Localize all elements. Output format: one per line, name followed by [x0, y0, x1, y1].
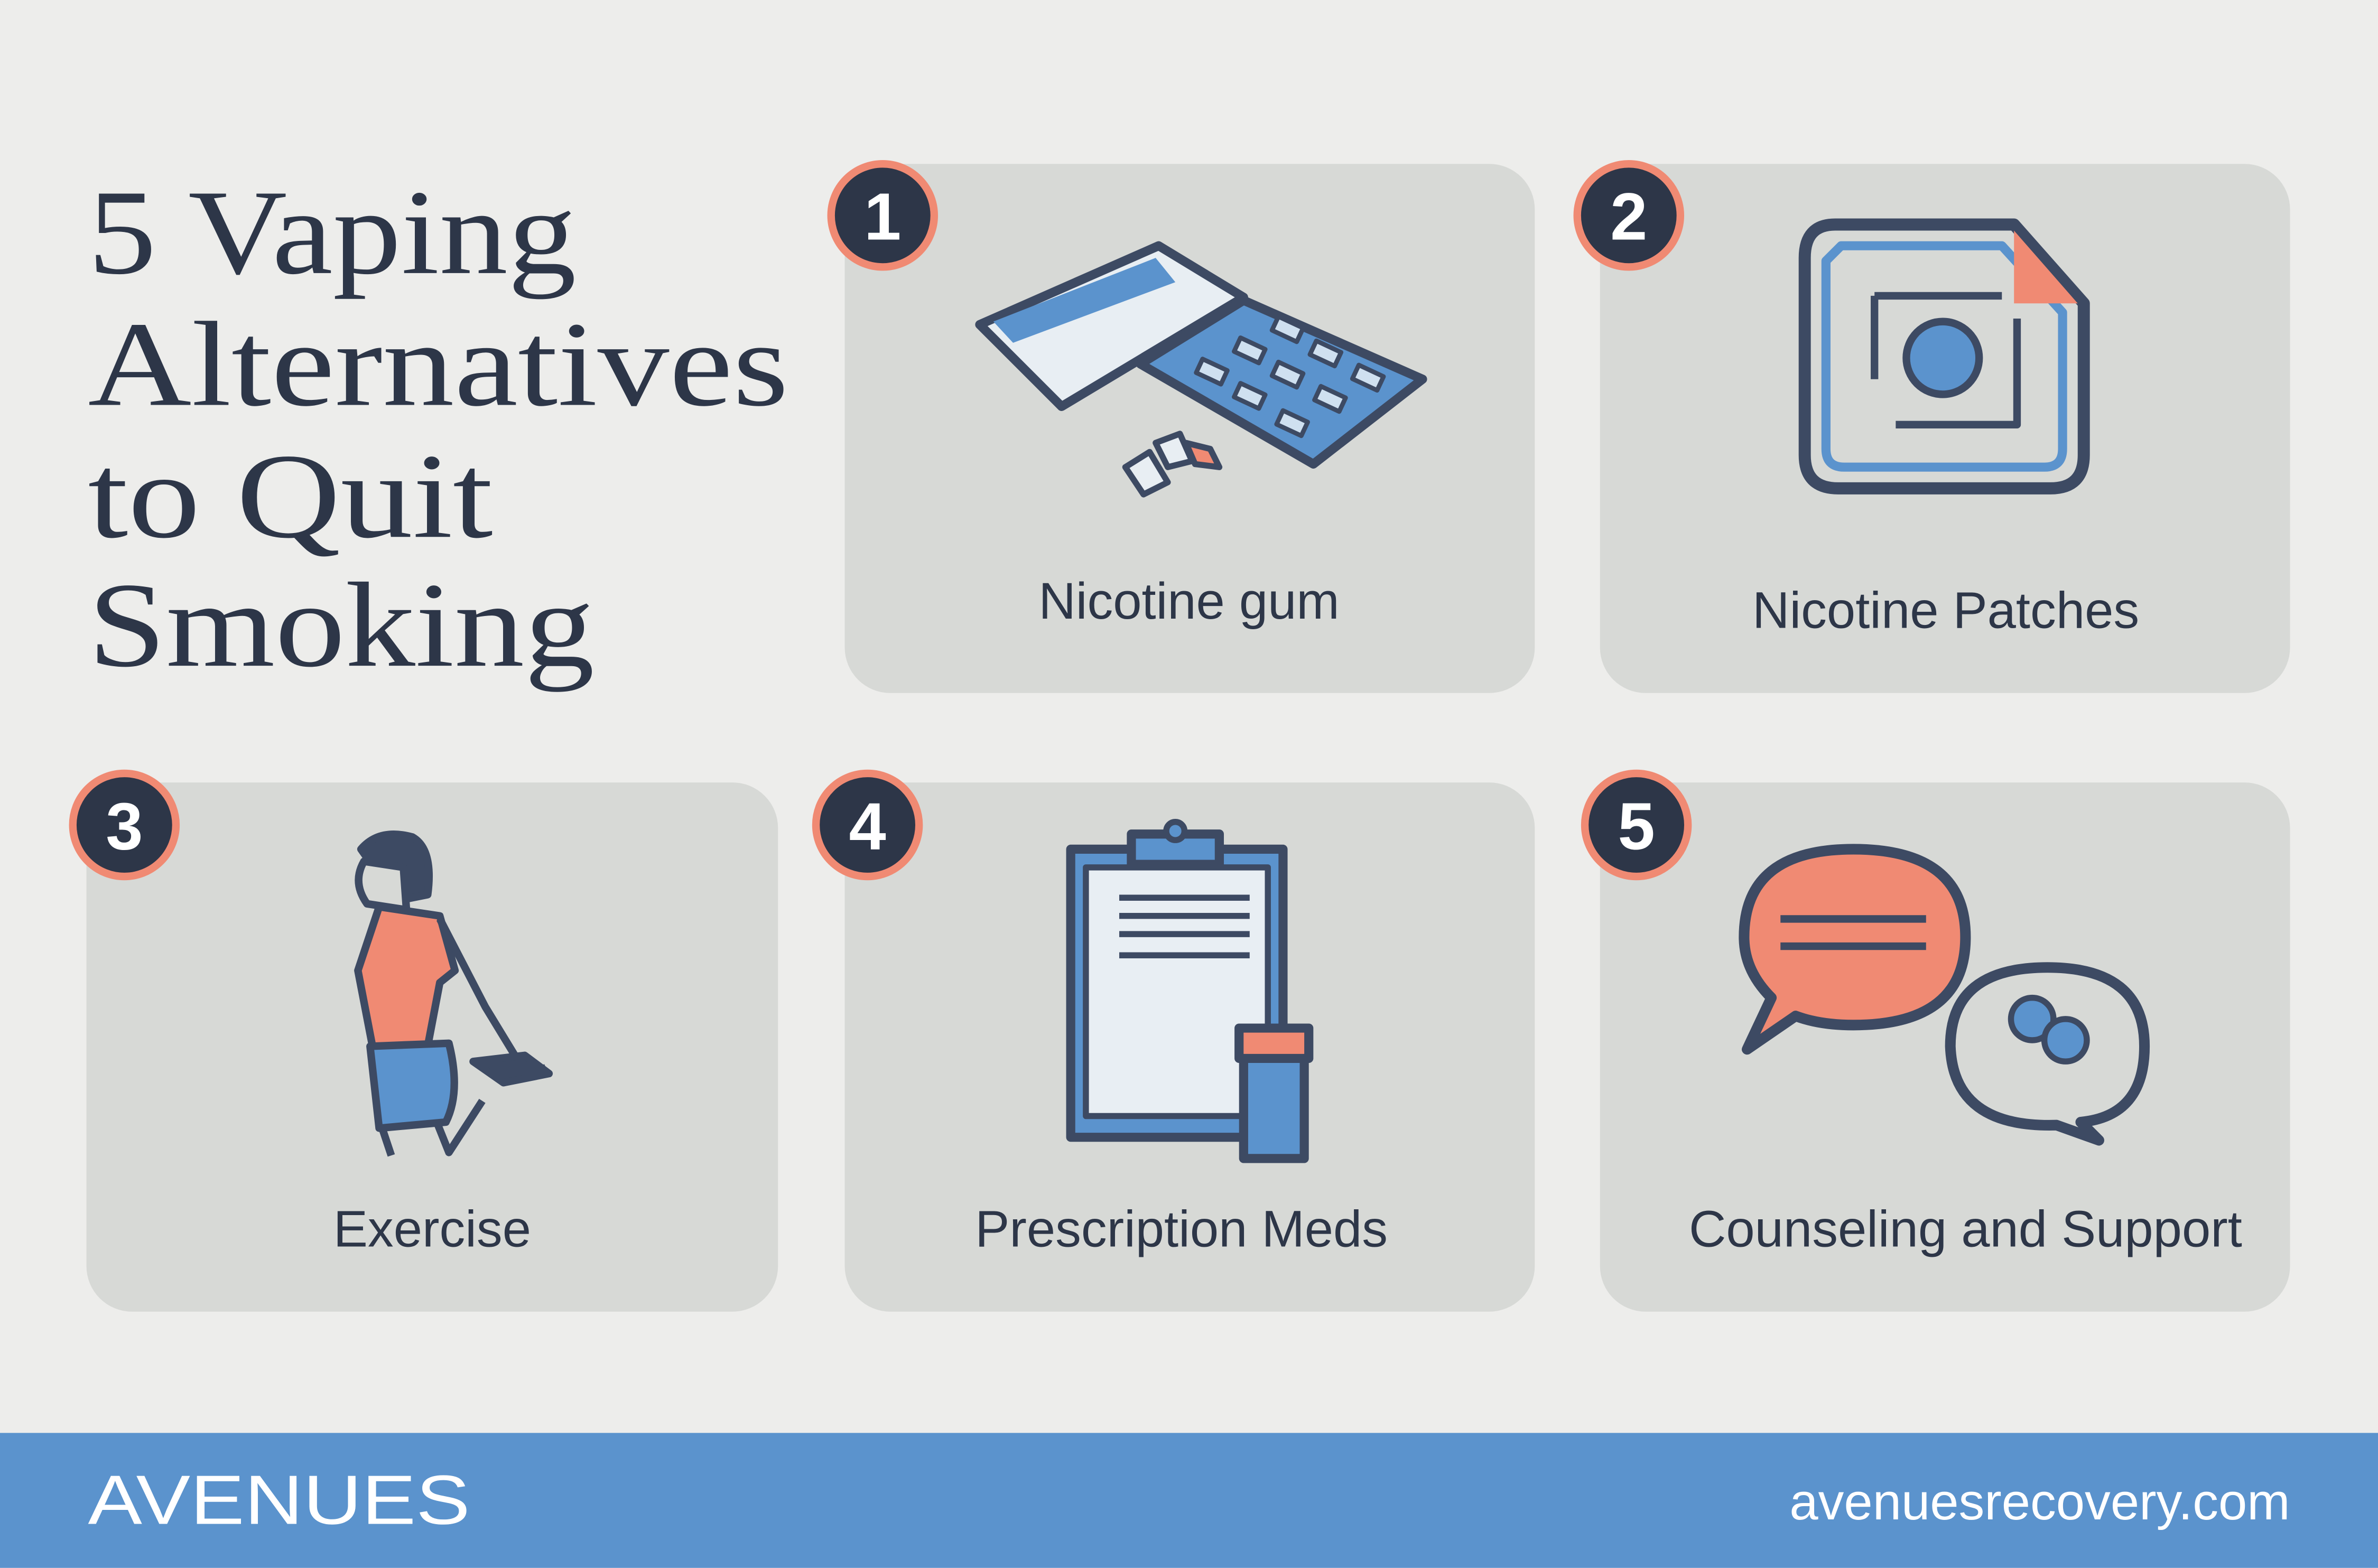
label: counseling and support: Counseling and Support: [1689, 1200, 2242, 1257]
panel: prescription meds: [845, 782, 1535, 1312]
title: [88, 165, 788, 692]
title: 5 Vaping: [88, 165, 577, 300]
badge 1: 1: [864, 180, 901, 254]
footer: [0, 1433, 2378, 1568]
label: prescription meds: Prescription Meds: [975, 1200, 1388, 1257]
badge 3: [73, 773, 176, 876]
logo: avenues: AVENUES: [88, 1461, 470, 1539]
badge 5: 5: [1618, 789, 1655, 863]
website url: avenuesrecovery.com: [1789, 1473, 2290, 1530]
icon: speech bubbles: [1744, 849, 2144, 1140]
label: nicotine patches: Nicotine Patches: [1752, 581, 2139, 639]
panel: exercise: [87, 782, 778, 1312]
icon: gum pack: [980, 246, 1423, 494]
panel: counseling and support: [1600, 782, 2290, 1312]
title: Alternatives: [88, 297, 788, 432]
badge 3: 3: [106, 789, 143, 863]
panel: nicotine patches: [1600, 164, 2290, 693]
icon: clipboard and pill bottle: [1071, 822, 1309, 1159]
icon: person: [358, 834, 549, 1155]
badge 5: [1585, 773, 1688, 876]
title: Smoking: [88, 557, 594, 692]
label: nicotine gum: Nicotine gum: [1038, 572, 1340, 630]
badge 2: [1577, 164, 1680, 267]
title: to Quit: [88, 428, 493, 563]
icon: patch: [1805, 225, 2084, 488]
label: exercise: Exercise: [333, 1200, 531, 1257]
panel: nicotine gum: [845, 164, 1535, 693]
badge 4: 4: [849, 789, 886, 863]
badge 2: 2: [1610, 180, 1647, 254]
badge 1: [831, 164, 934, 267]
badge 4: [816, 773, 919, 876]
